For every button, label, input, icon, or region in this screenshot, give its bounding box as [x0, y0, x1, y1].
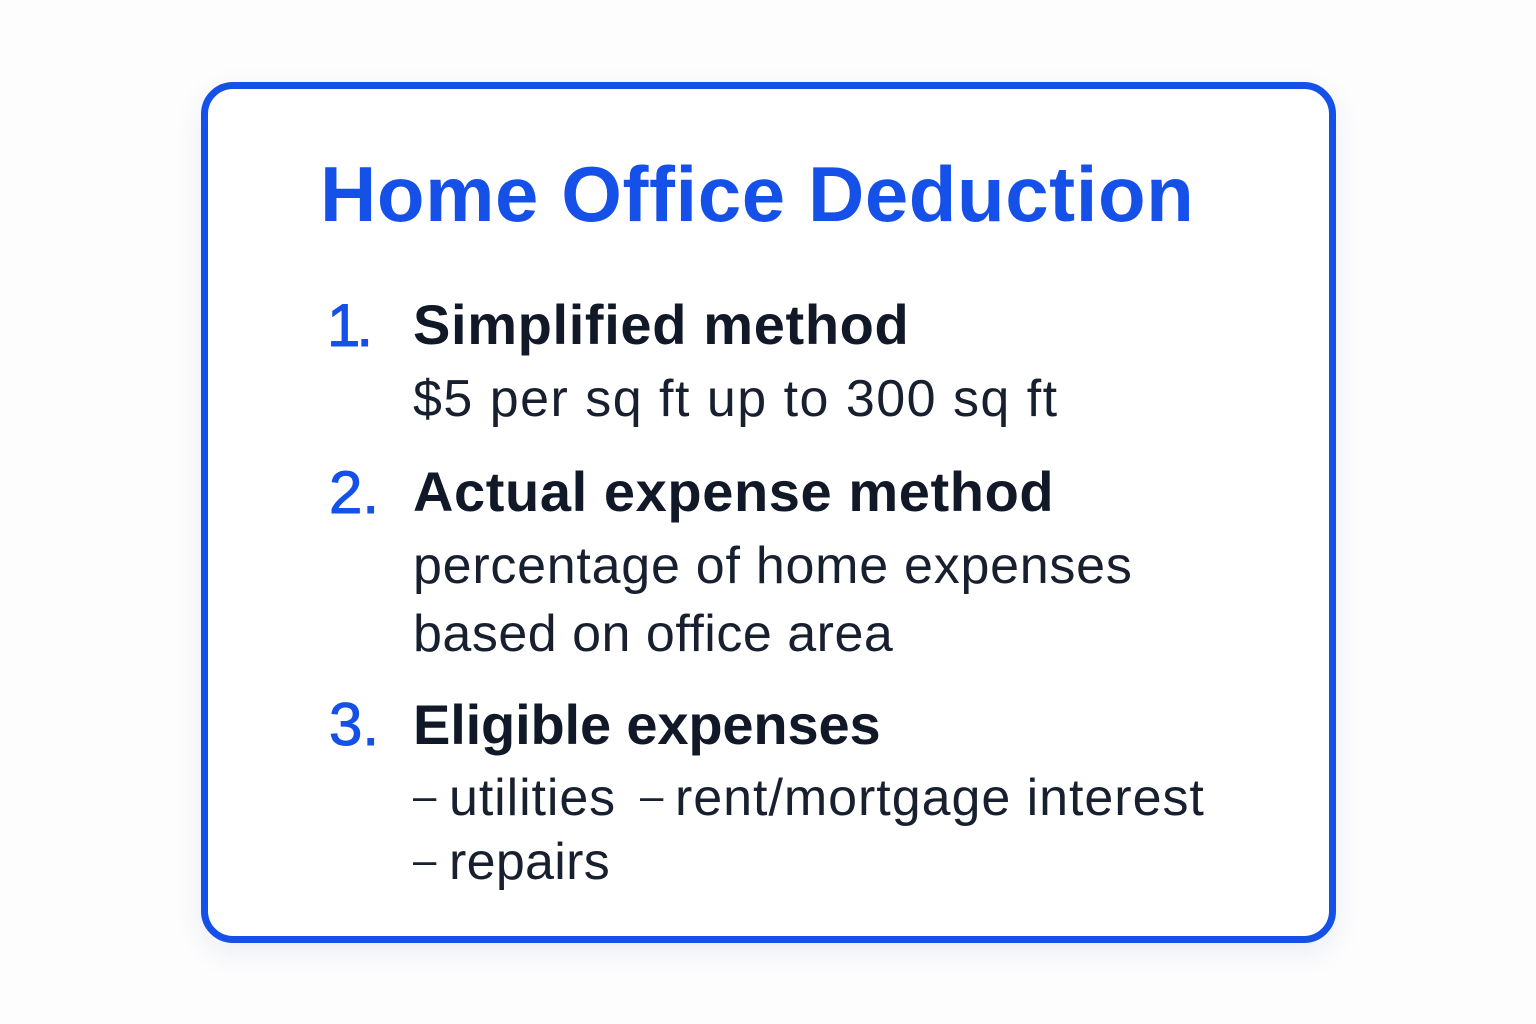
text: repairs: repairs: [449, 833, 610, 891]
dash: utilities: –: [413, 772, 436, 819]
text: utilities: utilities: [449, 769, 616, 827]
number 1: 1.: [327, 292, 369, 359]
text: simplified rate: $5 per sq ft up to 300 sq ft: [413, 370, 1059, 428]
heading: simplified method: Simplified method: [413, 293, 909, 356]
number 3: 3.: [329, 691, 379, 758]
dash: repairs: –: [413, 836, 436, 883]
heading: eligible expenses: Eligible expenses: [413, 692, 880, 756]
heading: actual expense method: Actual expense method: [413, 460, 1054, 523]
number 2: 2.: [329, 459, 379, 526]
dash: rent: –: [640, 772, 663, 819]
panel: card: [201, 82, 1336, 943]
text: actual expense description line 1: percentage of home expenses: [413, 537, 1133, 595]
title: Home Office Deduction: [320, 150, 1194, 238]
text: rent/mortgage interest: rent/mortgage interest: [675, 769, 1205, 827]
text: actual expense description line 2: based on office area: [413, 605, 893, 663]
